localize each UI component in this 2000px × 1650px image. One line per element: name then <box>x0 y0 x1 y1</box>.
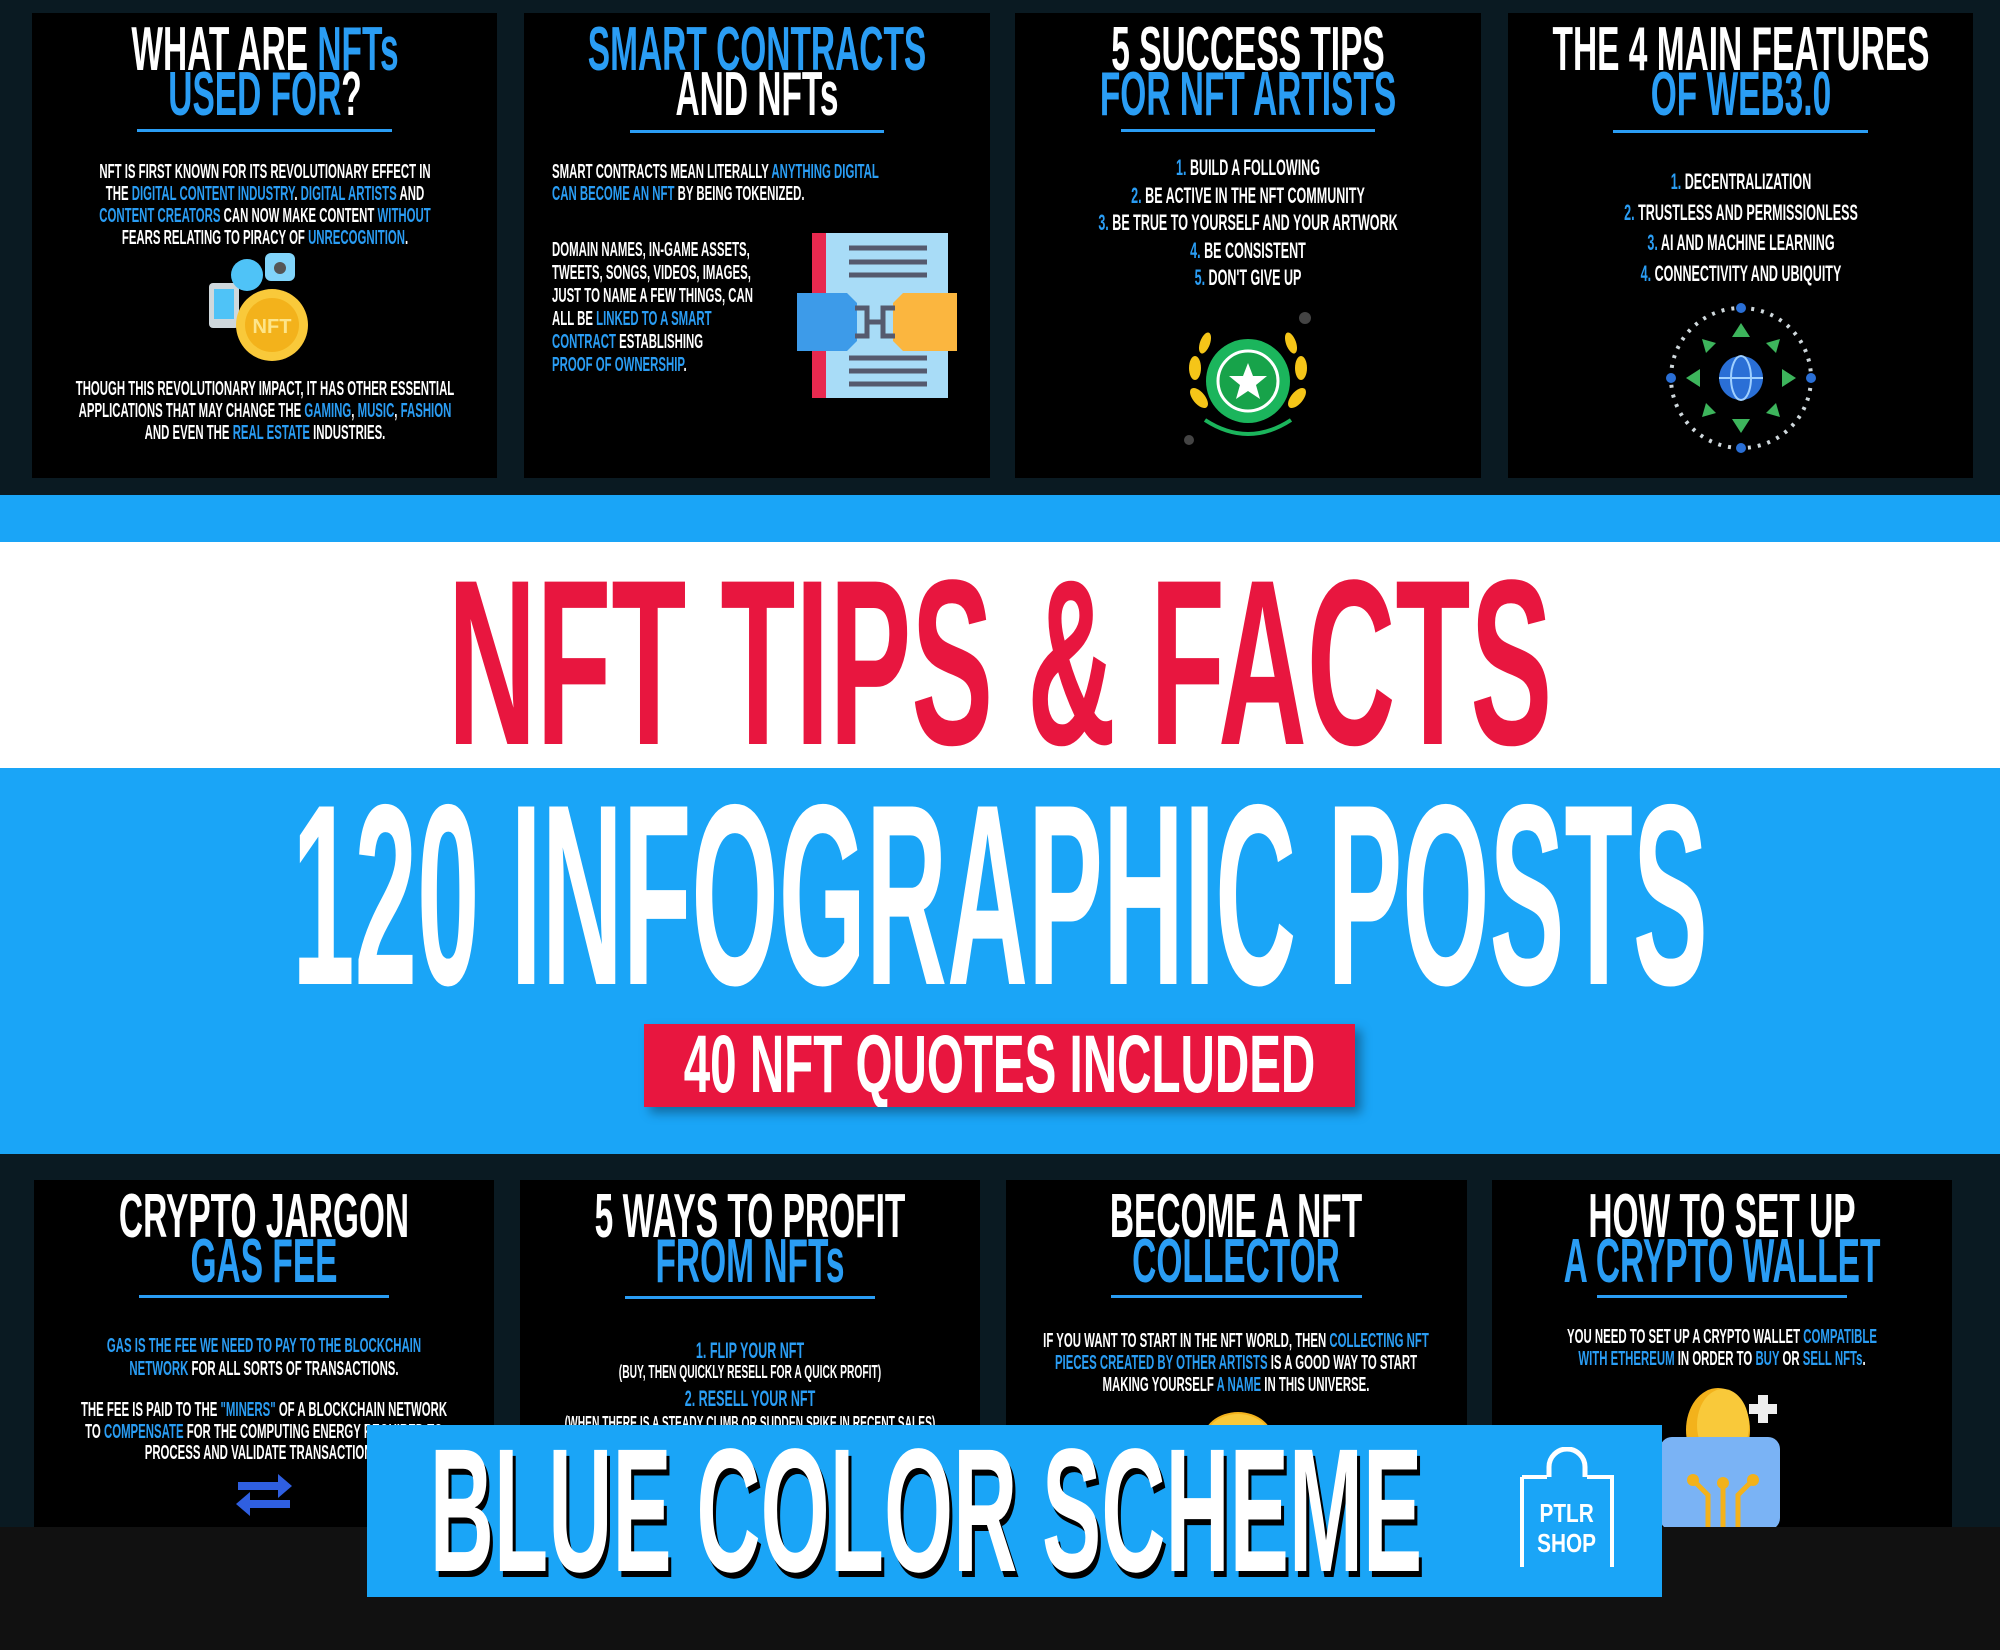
text block: applications: APPLICATIONS THAT MAY CHANGE THE GAMING, MUSIC, FASHION <box>79 400 451 422</box>
text block: intro: NFT IS FIRST KNOWN FOR ITS REVOLUTIONARY EFFECT IN <box>99 161 431 183</box>
heading <box>1110 1182 1362 1296</box>
heading: USED FOR? <box>168 60 362 129</box>
list: (BUY, THEN QUICKLY RESELL FOR A QUICK PROFIT) <box>619 1362 881 1382</box>
list: 5. DON'T GIVE UP <box>1195 265 1301 290</box>
heading: AND NFTs <box>675 60 839 129</box>
text block: applications: AND EVEN THE REAL ESTATE INDUSTRIES. <box>145 422 385 444</box>
icon: coin <box>1208 1412 1268 1425</box>
text block: intro: THE DIGITAL CONTENT INDUSTRY. DIGITAL ARTISTS AND <box>106 183 424 205</box>
text block: PROCESS AND VALIDATE TRANSACTIONS. <box>145 1442 383 1464</box>
heading: THE 4 MAIN FEATURES <box>1553 15 1929 84</box>
list: 2. RESELL YOUR NFT <box>685 1386 815 1411</box>
text block: examples <box>552 239 753 376</box>
heading <box>1100 15 1396 129</box>
bottom dark strip <box>0 1527 2000 1650</box>
heading <box>595 1182 905 1296</box>
text block: MAKING YOURSELF A NAME IN THIS UNIVERSE. <box>1103 1374 1369 1396</box>
icon: globe network <box>1666 303 1816 453</box>
text block: SMART CONTRACTS MEAN LITERALLY ANYTHING DIGITAL <box>552 161 879 183</box>
text block: TO COMPENSATE FOR THE COMPUTING ENERGY REQUIRED TO <box>85 1420 443 1442</box>
list: 1. DECENTRALIZATION <box>1671 169 1811 194</box>
list: 4. CONNECTIVITY AND UBIQUITY <box>1641 260 1841 286</box>
text block: intro <box>99 161 431 249</box>
text block: examples: DOMAIN NAMES, IN-GAME ASSETS, <box>552 239 750 261</box>
heading: FROM NFTs <box>655 1227 845 1296</box>
title: NFT TIPS & FACTS <box>448 531 1552 795</box>
text block: WITH ETHEREUM IN ORDER TO BUY OR SELL NFTs. <box>1578 1348 1866 1370</box>
list: 1. BUILD A FOLLOWING <box>1176 155 1320 180</box>
text block: CAN BECOME AN NFT BY BEING TOKENIZED. <box>552 183 805 205</box>
text block: IF YOU WANT TO START IN THE NFT WORLD, THEN COLLECTING NFT <box>1043 1330 1429 1352</box>
heading <box>1552 15 1929 129</box>
icon: exchange arrows <box>236 1474 292 1516</box>
heading <box>588 15 926 129</box>
icon: NFT coin <box>209 253 308 361</box>
text block: examples: ALL BE LINKED TO A SMART <box>552 308 712 330</box>
text block <box>1567 1326 1877 1370</box>
panel: ways to profit <box>520 1180 980 1540</box>
subtitle: 120 INFOGRAPHIC POSTS <box>292 750 1708 1039</box>
heading: COLLECTOR <box>1132 1227 1340 1296</box>
text block: applications: THOUGH THIS REVOLUTIONARY IMPACT, IT HAS OTHER ESSENTIAL <box>76 378 454 400</box>
text block <box>107 1335 421 1380</box>
text block: examples: PROOF OF OWNERSHIP. <box>552 354 687 376</box>
heading <box>119 1182 409 1296</box>
banner: blue band <box>0 495 2000 1154</box>
heading <box>131 15 399 129</box>
heading: BECOME A NFT <box>1110 1182 1362 1251</box>
list: 2. BE ACTIVE IN THE NFT COMMUNITY <box>1131 182 1365 208</box>
text block: intro: CONTENT CREATORS CAN NOW MAKE CONTENT WITHOUT <box>99 205 431 227</box>
icon: PTLR shop logo: SHOP <box>1537 1529 1596 1558</box>
text block: applications <box>76 378 454 444</box>
list: 2. TRUSTLESS AND PERMISSIONLESS <box>1624 200 1858 224</box>
panel: what are NFTs used for <box>32 13 497 478</box>
text block: examples: TWEETS, SONGS, VIDEOS, IMAGES, <box>552 262 751 284</box>
title band <box>0 542 2000 768</box>
list <box>565 1338 935 1433</box>
heading: GAS FEE <box>191 1227 337 1296</box>
panel: crypto wallet <box>1492 1180 1952 1540</box>
icon: NFT coin: NFT <box>253 316 291 338</box>
icon: PTLR shop logo: PTLR <box>1539 1499 1594 1528</box>
heading: FOR NFT ARTISTS <box>1100 60 1396 129</box>
list <box>1624 169 1858 286</box>
heading: 5 SUCCESS TIPS <box>1111 15 1385 84</box>
text block: PIECES CREATED BY OTHER ARTISTS IS A GOOD WAY TO START <box>1055 1352 1417 1374</box>
heading: A CRYPTO WALLET <box>1564 1227 1880 1296</box>
text block: examples: JUST TO NAME A FEW THINGS, CAN <box>552 285 753 307</box>
list: 3. BE TRUE TO YOURSELF AND YOUR ARTWORK <box>1098 210 1398 235</box>
text block: intro: FEARS RELATING TO PIRACY OF UNRECOGNITION. <box>122 227 408 249</box>
icon: PTLR shop logo <box>1520 1447 1614 1567</box>
heading: CRYPTO JARGON <box>119 1182 409 1251</box>
text block <box>1043 1330 1429 1396</box>
icon: wallet with coins <box>1662 1388 1780 1527</box>
panel: web3 features <box>1508 13 1973 478</box>
heading: WHAT ARE NFTs <box>131 15 399 84</box>
text block: GAS IS THE FEE WE NEED TO PAY TO THE BLOCKCHAIN <box>107 1335 421 1357</box>
list: 3. AI AND MACHINE LEARNING <box>1647 230 1835 255</box>
text block: NETWORK FOR ALL SORTS OF TRANSACTIONS. <box>129 1358 399 1380</box>
text block <box>81 1399 447 1464</box>
text block: THE FEE IS PAID TO THE "MINERS" OF A BLOCKCHAIN NETWORK <box>81 1399 447 1421</box>
heading: HOW TO SET UP <box>1588 1182 1856 1251</box>
panel: become a collector <box>1006 1180 1467 1540</box>
panel: crypto jargon gas fee <box>34 1180 494 1540</box>
panel: success tips <box>1015 13 1481 478</box>
list: 4. BE CONSISTENT <box>1190 238 1306 262</box>
callout: blue color scheme <box>367 1425 1662 1597</box>
text block: examples: CONTRACT ESTABLISHING <box>552 331 703 353</box>
heading: 5 WAYS TO PROFIT <box>595 1182 905 1251</box>
icon: contract document with chain <box>797 233 957 398</box>
heading: SMART CONTRACTS <box>588 15 926 84</box>
heading: OF WEB3.0 <box>1651 60 1831 129</box>
list <box>1098 155 1398 290</box>
list: (WHEN THERE IS A STEADY CLIMB OR SUDDEN SPIKE IN RECENT SALES) <box>565 1413 935 1433</box>
list: 1. FLIP YOUR NFT <box>696 1338 804 1363</box>
heading <box>1564 1182 1880 1296</box>
text block <box>552 161 879 205</box>
icon: laurel star <box>1184 312 1311 445</box>
panel: smart contracts <box>524 13 990 478</box>
text block: YOU NEED TO SET UP A CRYPTO WALLET COMPATIBLE <box>1567 1326 1877 1348</box>
